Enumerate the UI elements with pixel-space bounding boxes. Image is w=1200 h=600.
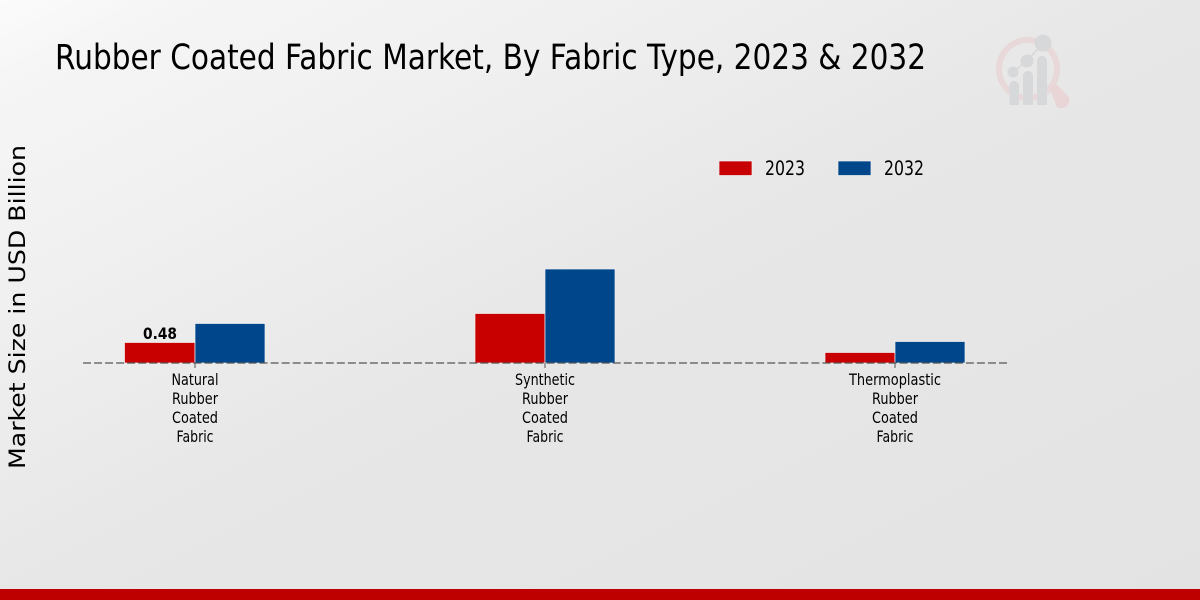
legend: 2023 [719,157,805,180]
footer bar [0,589,1200,600]
label: Natural: Fabric [176,427,214,446]
label: Natural: Rubber [172,389,218,408]
title: Rubber Coated Fabric Market, By Fabric Type, 2023 & 2032 [55,38,926,78]
label: Synthetic: Rubber [522,389,568,408]
label: Synthetic [515,363,575,446]
label: Natural [172,363,218,446]
legend [719,157,924,180]
legend: 2032 [838,157,924,180]
group: Thermoplastic Rubber Coated Fabric [825,342,965,363]
x-axis baseline [83,362,1007,364]
label: Thermoplastic: Fabric [876,427,914,446]
x-axis labels [172,363,941,446]
label: Thermoplastic: Rubber [872,389,918,408]
bar chart [83,269,1007,363]
label: Thermoplastic [848,363,941,446]
legend: 2032: 2032 [884,157,924,180]
group: Natural Rubber Coated Fabric [124,324,265,363]
icon: watermark logo [999,34,1069,108]
group: Synthetic Rubber Coated Fabric [475,269,615,363]
label: Natural: Coated [172,408,218,427]
group: Natural Rubber Coated Fabric: 0.48 [143,324,177,343]
label: Thermoplastic: Coated [872,408,918,427]
label: Synthetic: Coated [522,408,568,427]
label: Synthetic: Synthetic [515,370,575,389]
label: Natural: Natural [172,370,218,389]
y-axis title: Market Size in USD Billion [6,145,31,469]
label: Thermoplastic: Thermoplastic [848,370,941,389]
legend: 2023: 2023 [765,157,805,180]
label: Synthetic: Fabric [526,427,564,446]
